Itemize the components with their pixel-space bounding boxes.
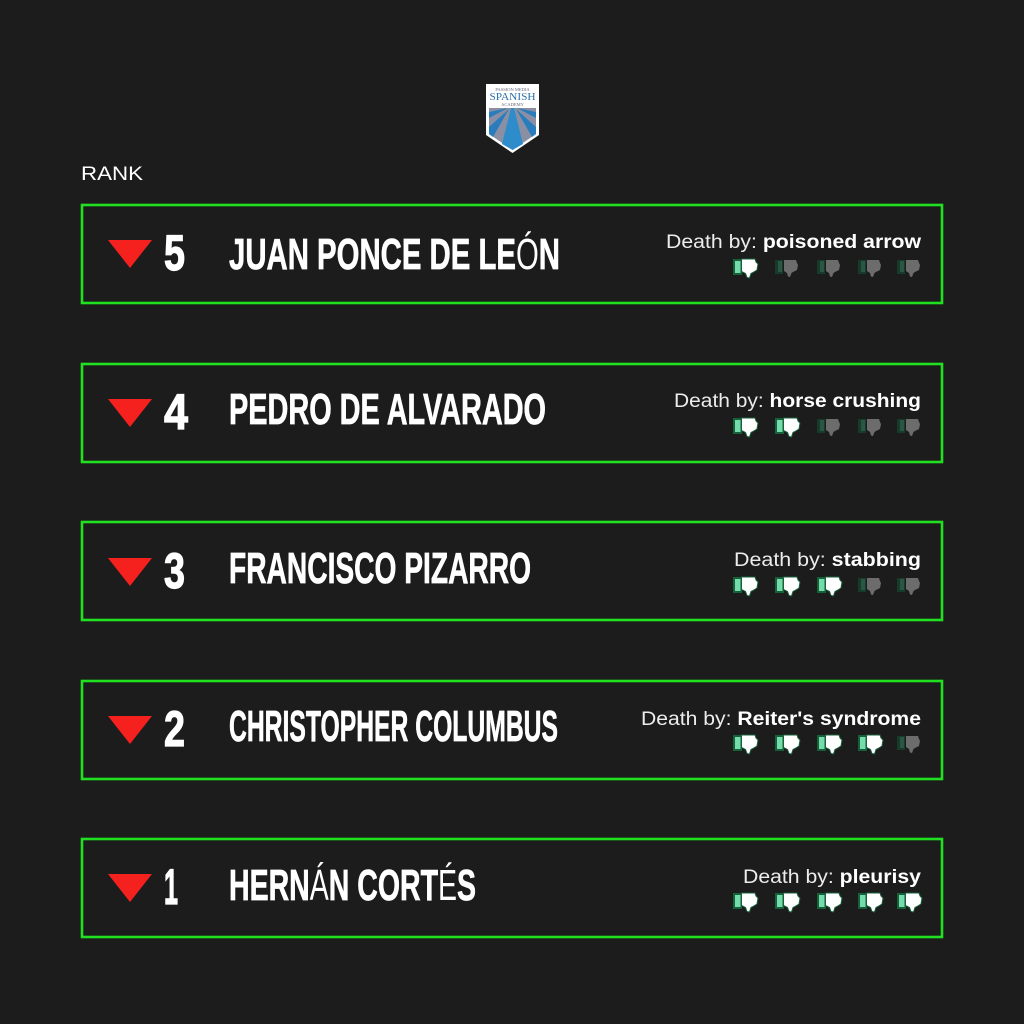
icon: red down triangle — [108, 558, 152, 586]
name: PEDRO DE ALVARADO — [229, 385, 546, 434]
panel: rank 3 — [82, 522, 942, 620]
panel: rank 1 — [82, 839, 942, 937]
cause of death: Death by: poisoned arrow — [666, 232, 921, 253]
rating: thumbs down — [733, 418, 920, 437]
rank number: 4 — [164, 384, 188, 440]
name: CHRISTOPHER COLUMBUS — [229, 702, 558, 751]
rating: thumbs down — [733, 735, 920, 754]
icon: red down triangle — [108, 399, 152, 427]
cause of death: Death by: horse crushing — [674, 391, 921, 412]
panel: rank 5 — [82, 205, 942, 303]
rating: thumbs down — [733, 259, 920, 278]
name: HERNÁN CORTÉS — [229, 861, 476, 910]
cause of death: Death by: Reiter's syndrome — [641, 709, 921, 730]
name: FRANCISCO PIZARRO — [229, 544, 531, 593]
cause of death: Death by: stabbing — [734, 550, 921, 571]
name: JUAN PONCE DE LEÓN — [229, 230, 560, 279]
rank number: 1 — [164, 859, 178, 915]
rank number: 3 — [164, 543, 185, 599]
rating: thumbs down — [733, 577, 920, 596]
icon: red down triangle — [108, 240, 152, 268]
rating: thumbs down — [733, 893, 922, 912]
panel: rank 2 — [82, 681, 942, 779]
rank number: 5 — [164, 225, 185, 281]
icon: red down triangle — [108, 716, 152, 744]
icon: red down triangle — [108, 874, 152, 902]
cause of death: Death by: pleurisy — [743, 867, 921, 888]
logo: Spanish academy shield: PASSION MEDIA — [495, 87, 530, 92]
logo: Spanish academy shield — [486, 84, 539, 153]
logo: Spanish academy shield: SPANISH — [490, 92, 536, 103]
logo: Spanish academy shield: ACADEMY — [501, 102, 525, 107]
rank number: 2 — [164, 701, 185, 757]
rank heading: RANK — [81, 164, 143, 185]
panel: rank 4 — [82, 364, 942, 462]
